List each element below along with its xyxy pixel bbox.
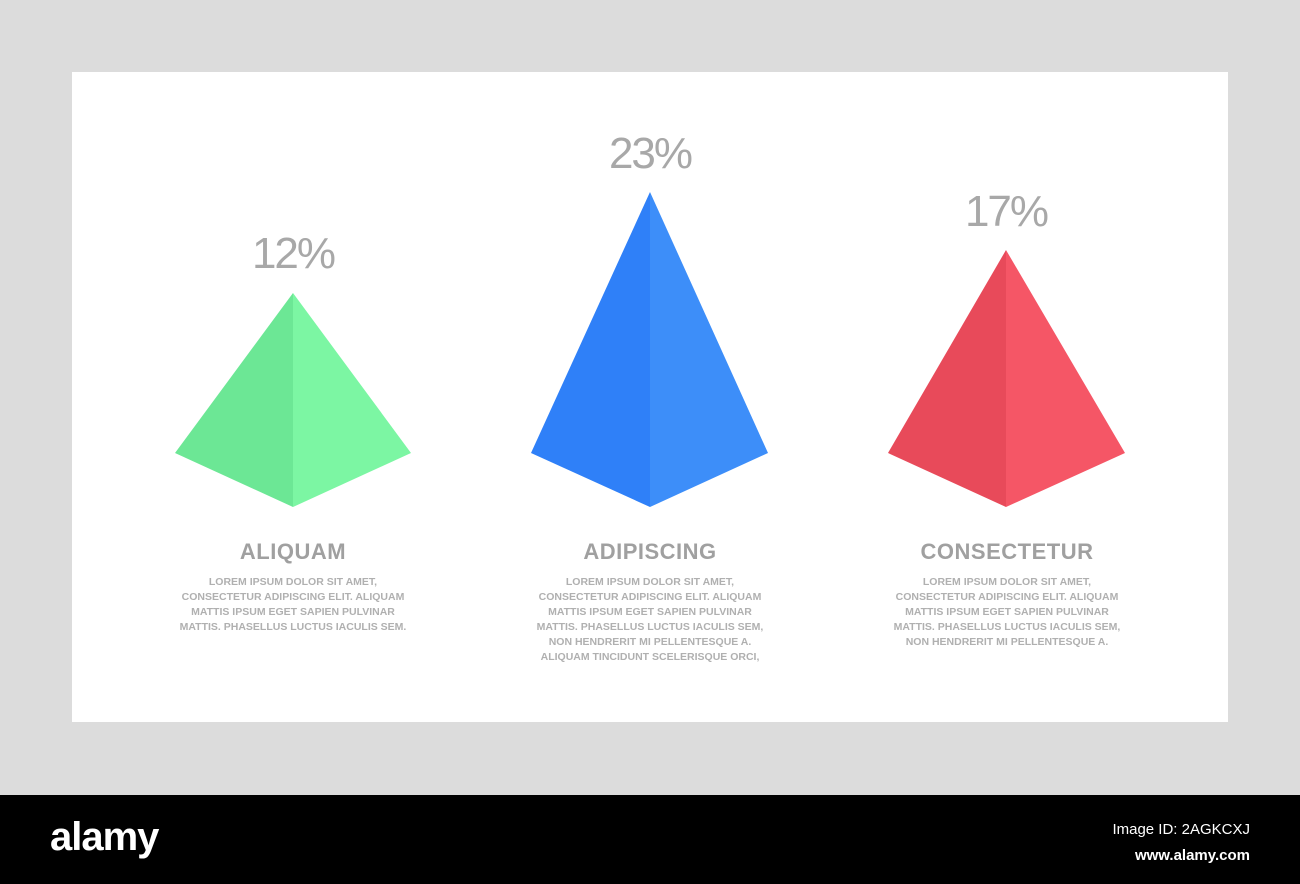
text: aliquam xyxy=(180,576,406,633)
pyramid: red xyxy=(888,250,1125,507)
percent 17: 17% xyxy=(965,187,1047,236)
title: adipiscing: ADIPISCING xyxy=(583,539,717,564)
text: consectetur: CONSECTETUR ADIPISCING ELIT. ALIQUAM xyxy=(896,591,1118,603)
text: consectetur: LOREM IPSUM DOLOR SIT AMET, xyxy=(923,576,1091,588)
percent 12: 12% xyxy=(252,229,334,278)
text: adipiscing xyxy=(537,576,763,663)
title: consectetur: CONSECTETUR xyxy=(921,539,1093,564)
text: adipiscing: MATTIS. PHASELLUS LUCTUS IACULIS SEM, xyxy=(537,621,763,633)
footer id xyxy=(1112,821,1250,864)
text: aliquam: MATTIS IPSUM EGET SAPIEN PULVINAR xyxy=(191,606,395,618)
footer bar xyxy=(0,795,1300,884)
text: aliquam: MATTIS. PHASELLUS LUCTUS IACULIS SEM. xyxy=(180,621,406,633)
percent 23: 23% xyxy=(609,129,691,178)
text: consectetur xyxy=(894,576,1120,648)
text: consectetur: NON HENDRERIT MI PELLENTESQUE A. xyxy=(906,636,1108,648)
footer id: www.alamy.com xyxy=(1135,847,1250,864)
text: aliquam: LOREM IPSUM DOLOR SIT AMET, xyxy=(209,576,377,588)
text: adipiscing: MATTIS IPSUM EGET SAPIEN PULVINAR xyxy=(548,606,752,618)
text: aliquam: CONSECTETUR ADIPISCING ELIT. ALIQUAM xyxy=(182,591,404,603)
text: consectetur: MATTIS IPSUM EGET SAPIEN PULVINAR xyxy=(905,606,1109,618)
text: adipiscing: LOREM IPSUM DOLOR SIT AMET, xyxy=(566,576,734,588)
title: aliquam: ALIQUAM xyxy=(240,539,346,564)
text: adipiscing: CONSECTETUR ADIPISCING ELIT. ALIQUAM xyxy=(539,591,761,603)
text: consectetur: MATTIS. PHASELLUS LUCTUS IACULIS SEM, xyxy=(894,621,1120,633)
pyramid: green xyxy=(175,293,411,507)
text: adipiscing: ALIQUAM TINCIDUNT SCELERISQUE ORCI, xyxy=(541,651,759,663)
footer id: Image ID: 2AGKCXJ xyxy=(1112,821,1250,838)
white panel xyxy=(72,72,1228,722)
text: adipiscing: NON HENDRERIT MI PELLENTESQUE A. xyxy=(549,636,751,648)
pyramid: blue xyxy=(531,192,768,507)
footer logo: alamy xyxy=(50,815,158,859)
